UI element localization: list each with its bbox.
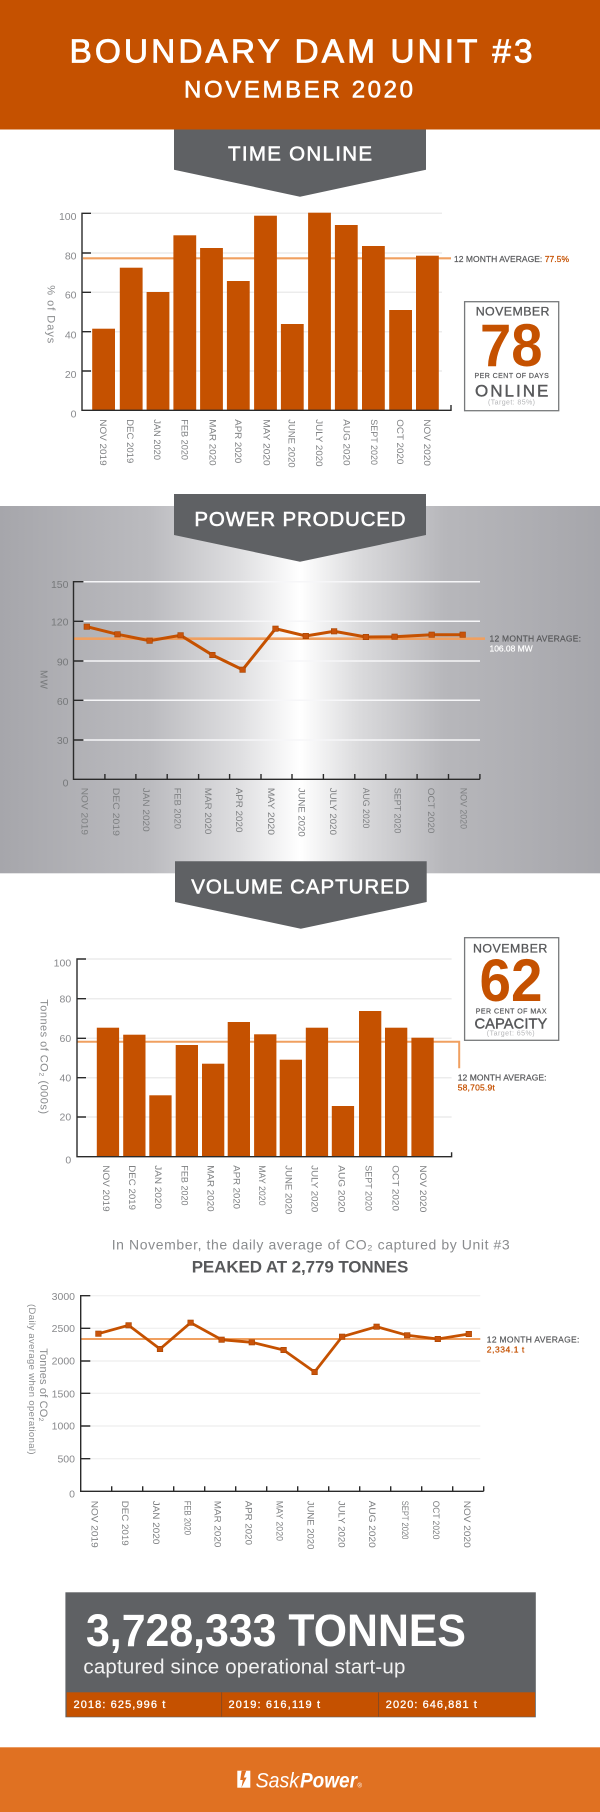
- header band: [0, 0, 600, 130]
- y axis subtitle: (Daily average when operational): [26, 1304, 37, 1454]
- y axis title: MW: [38, 670, 48, 690]
- footer band: [0, 1747, 600, 1812]
- x axis labels: APR 2020: [233, 788, 244, 832]
- x axis labels: SEPT 2020: [368, 419, 379, 465]
- logo wordmark: Power: [300, 1768, 358, 1792]
- y axis labels: 120: [51, 617, 69, 629]
- grid lines: [86, 959, 452, 1117]
- x axis labels: JAN 2020: [151, 419, 162, 460]
- data line: [98, 1323, 469, 1372]
- panel: volume captured chart: [37, 957, 547, 1214]
- x axis labels: FEB 2020: [178, 1165, 189, 1206]
- x axis labels: DEC 2019: [119, 1501, 130, 1546]
- y axis labels: [52, 1291, 75, 1501]
- callout: november 78 per cent online: ONLINE: [475, 382, 548, 401]
- y axis labels: 500: [57, 1454, 75, 1466]
- callout: november 62 per cent capacity: NOVEMBER: [473, 941, 547, 955]
- x axis labels: DEC 2019: [124, 419, 135, 463]
- section banner: power produced: [174, 494, 426, 562]
- y axis labels: 2000: [52, 1356, 75, 1368]
- callout: november 78 per cent online: NOVEMBER: [476, 305, 550, 319]
- 12 month average line: [81, 1338, 480, 1340]
- y axis labels: [59, 211, 77, 420]
- y axis labels: 0: [63, 777, 69, 789]
- data markers: [96, 1320, 472, 1375]
- text block: daily average statement: [112, 1236, 510, 1276]
- x axis labels: MAR 2020: [204, 1165, 215, 1212]
- y axis labels: 60: [65, 290, 77, 302]
- average label: 12 MONTH AVERAGE: 77.5%: [454, 254, 569, 264]
- x axis labels: OCT 2020: [390, 1165, 401, 1211]
- y axis labels: 60: [60, 1033, 71, 1045]
- x axis labels: MAR 2020: [202, 788, 213, 834]
- x axis labels: SEPT 2020: [399, 1501, 410, 1539]
- y axis labels: 150: [51, 579, 69, 591]
- x axis labels: OCT 2020: [425, 788, 436, 833]
- x axis labels: JULY 2020: [336, 1501, 347, 1548]
- axes: [74, 582, 480, 779]
- average label: 12 MONTH AVERAGE:: [487, 1334, 579, 1344]
- callout: november 78 per cent online: PER CENT OF DAYS: [474, 373, 549, 380]
- y axis title: Tonnes of CO₂: [37, 1348, 49, 1422]
- grid lines: [90, 1296, 480, 1459]
- x axis labels: NOV 2020: [458, 788, 469, 829]
- y axis labels: 20: [65, 369, 77, 381]
- data line: [87, 627, 463, 670]
- y axis title: % of Days: [45, 285, 57, 344]
- x axis labels: NOV 2019: [78, 788, 90, 835]
- section banner: volume captured: [175, 861, 427, 929]
- x axis labels: [100, 1165, 428, 1214]
- title: BOUNDARY DAM UNIT #3: [70, 34, 532, 71]
- callout: november 62 per cent capacity: PER CENT OF MAX: [476, 1009, 547, 1016]
- x axis labels: OCT 2020: [394, 419, 405, 464]
- x axis labels: JUNE 2020: [296, 788, 306, 837]
- grid lines: [83, 582, 480, 740]
- y axis labels: 60: [57, 696, 69, 708]
- average label: [487, 1334, 579, 1354]
- logo wordmark: ®: [358, 1782, 362, 1789]
- average label: 12 MONTH AVERAGE:: [458, 1072, 546, 1082]
- x axis labels: AUG 2020: [336, 1165, 347, 1212]
- annual strip: 2018: 625,996 t: [74, 1699, 165, 1711]
- x axis labels: JAN 2020: [152, 1165, 163, 1209]
- y axis labels: [51, 579, 69, 789]
- 12 month average line: [83, 257, 451, 259]
- y axis labels: 30: [57, 735, 69, 747]
- panel: power produced chart: [38, 579, 581, 837]
- annual strip: 2019: 616,119 t: [228, 1699, 320, 1711]
- x axis labels: MAY 2020: [261, 419, 272, 466]
- callout: november 78 per cent online: 78: [480, 312, 542, 379]
- average label: 12 MONTH AVERAGE:: [490, 634, 581, 644]
- x axis labels: MAY 2020: [274, 1501, 285, 1541]
- callout: november 62 per cent capacity: CAPACITY: [474, 1016, 548, 1032]
- x axis labels: FEB 2020: [181, 1501, 192, 1535]
- callout: november 78 per cent online: [465, 302, 559, 411]
- 12 month average line: [74, 637, 485, 640]
- y axis labels: 100: [54, 957, 71, 969]
- section banner: time online: [174, 130, 426, 197]
- x axis labels: DEC 2019: [110, 788, 121, 836]
- x axis labels: JULY 2020: [327, 788, 338, 835]
- callout: november 62 per cent capacity: (Target: 65%): [487, 1031, 535, 1038]
- section banner: volume captured: VOLUME CAPTURED: [191, 875, 410, 898]
- logo wordmark: [256, 1768, 362, 1792]
- x axis labels: SEPT 2020: [362, 1165, 373, 1211]
- y axis labels: 3000: [52, 1291, 75, 1303]
- x axis labels: JUNE 2020: [305, 1501, 316, 1549]
- average label: 2,334.1 t: [487, 1344, 525, 1354]
- bars: [92, 213, 439, 410]
- panel: daily average chart: [26, 1291, 579, 1549]
- data markers: [84, 624, 466, 672]
- y axis labels: 1500: [52, 1388, 75, 1400]
- x axis labels: NOV 2020: [421, 419, 432, 466]
- y axis labels: 20: [60, 1112, 71, 1124]
- panel: total tonnes captured: [65, 1592, 536, 1717]
- x axis labels: NOV 2020: [417, 1165, 428, 1212]
- axes: [77, 959, 452, 1157]
- grid lines: [91, 213, 442, 371]
- y axis labels: 80: [60, 993, 71, 1005]
- y axis labels: 40: [65, 329, 77, 341]
- annual strip: [67, 1692, 535, 1717]
- x axis labels: JULY 2020: [313, 419, 324, 467]
- average label: [490, 634, 581, 654]
- callout: november 78 per cent online: (Target: 85%): [488, 400, 535, 407]
- y axis labels: 0: [71, 408, 77, 420]
- x axis labels: SEPT 2020: [392, 788, 402, 833]
- heading: peaked at: PEAKED AT 2,779 TONNES: [192, 1257, 408, 1276]
- big total: 3,728,333 TONNES: [86, 1605, 466, 1656]
- x axis labels: FEB 2020: [172, 788, 182, 829]
- x axis labels: JULY 2020: [308, 1165, 320, 1212]
- x axis labels: [88, 1501, 472, 1549]
- y axis labels: 0: [65, 1155, 71, 1167]
- callout: november 62 per cent capacity: [465, 938, 559, 1040]
- 12 month average line: [77, 1042, 459, 1068]
- x axis labels: DEC 2019: [126, 1165, 137, 1210]
- x axis labels: JAN 2020: [140, 788, 151, 832]
- section banner: time online: TIME ONLINE: [228, 143, 372, 166]
- bars: [97, 1011, 434, 1157]
- x axis labels: NOV 2020: [461, 1501, 472, 1548]
- x axis labels: JAN 2020: [150, 1501, 161, 1544]
- x axis labels: MAR 2020: [206, 419, 217, 466]
- annual strip: 2020: 646,881 t: [386, 1699, 477, 1711]
- logo wordmark: Sask: [256, 1768, 300, 1792]
- x axis labels: JUNE 2020: [286, 419, 296, 468]
- y axis labels: 1000: [52, 1421, 75, 1433]
- y axis labels: 0: [69, 1489, 75, 1501]
- x axis labels: MAY 2020: [265, 788, 276, 835]
- subtitle: NOVEMBER 2020: [184, 77, 413, 104]
- axes: [81, 1296, 484, 1491]
- average label: 58,705.9t: [458, 1082, 495, 1092]
- y axis labels: 100: [59, 211, 77, 223]
- x axis labels: OCT 2020: [430, 1501, 441, 1539]
- callout: november 62 per cent capacity: 62: [480, 947, 542, 1014]
- average label: 106.08 MW: [490, 644, 533, 654]
- x axis labels: MAY 2020: [256, 1165, 267, 1206]
- x axis labels: NOV 2019: [97, 419, 108, 466]
- y axis labels: 40: [60, 1072, 71, 1084]
- text block: daily average statement: In November, the daily average of CO₂ captured by Unit #3: [112, 1236, 510, 1252]
- panel: time online chart: [45, 211, 569, 468]
- axes: [82, 213, 451, 410]
- x axis labels: AUG 2020: [366, 1501, 377, 1548]
- panel: power produced background: [0, 506, 600, 873]
- x axis labels: AUG 2020: [360, 788, 371, 828]
- y axis title: Tonnes of CO₂ (000s): [37, 999, 49, 1114]
- x axis labels: APR 2020: [242, 1501, 253, 1545]
- y axis labels: [54, 957, 71, 1167]
- average label: [458, 1072, 546, 1092]
- x axis labels: FEB 2020: [179, 419, 190, 460]
- x axis labels: APR 2020: [230, 1165, 241, 1209]
- x axis labels: [97, 419, 432, 468]
- x axis labels: APR 2020: [232, 419, 243, 463]
- x axis labels: [78, 788, 469, 837]
- x axis labels: NOV 2019: [88, 1501, 99, 1548]
- y axis labels: 80: [65, 250, 77, 262]
- section banner: power produced: POWER PRODUCED: [194, 508, 406, 531]
- x axis labels: JUNE 2020: [282, 1165, 293, 1214]
- y axis labels: 2500: [52, 1323, 75, 1335]
- y axis labels: 90: [57, 656, 69, 668]
- x axis labels: AUG 2020: [341, 419, 352, 466]
- x axis labels: MAR 2020: [212, 1501, 223, 1547]
- total caption: captured since operational start-up: [83, 1655, 405, 1678]
- icon: saskpower logo mark: [237, 1771, 250, 1788]
- x axis labels: NOV 2019: [100, 1165, 111, 1212]
